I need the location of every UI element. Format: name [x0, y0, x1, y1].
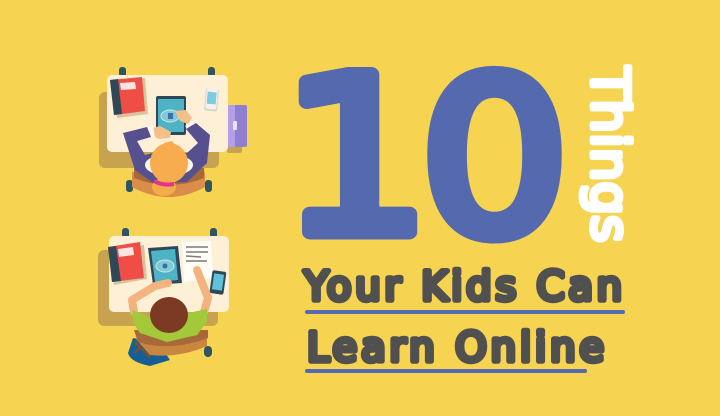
chair [132, 168, 205, 197]
purple jacket [123, 123, 210, 183]
digit 1: 1 [281, 32, 431, 284]
drawer [227, 105, 247, 153]
desk legs [119, 67, 215, 192]
underline 2 [305, 369, 587, 373]
headline number: 10 [281, 32, 569, 285]
backpack [128, 338, 170, 366]
desk top [107, 75, 228, 152]
subtitle line: Learn Online: Learn Online [307, 325, 604, 371]
girl hair [150, 141, 188, 196]
chair [134, 330, 208, 356]
boy head [150, 297, 188, 333]
digit 0: 0 [420, 34, 569, 285]
label: Things: Things [579, 66, 640, 243]
notebook [110, 77, 148, 118]
desk legs [122, 228, 217, 357]
hair band [154, 181, 174, 185]
paper [182, 241, 213, 282]
tablet [156, 96, 186, 135]
hands [153, 110, 192, 139]
phone [204, 89, 219, 112]
underline 1 [305, 310, 625, 314]
phone [209, 270, 226, 295]
desk top [109, 236, 229, 312]
green shirt [132, 309, 207, 342]
arms [132, 270, 208, 312]
illustration: boy at desk [98, 228, 229, 366]
cuffs [146, 120, 199, 138]
desk shadow [98, 250, 218, 326]
notebook [108, 242, 147, 285]
desk shadow [99, 92, 219, 168]
illustration: girl at desk [99, 67, 247, 197]
subtitle line: Your Kids Can: Your Kids Can [303, 264, 622, 310]
white collar [145, 154, 193, 176]
tablet [148, 246, 182, 285]
